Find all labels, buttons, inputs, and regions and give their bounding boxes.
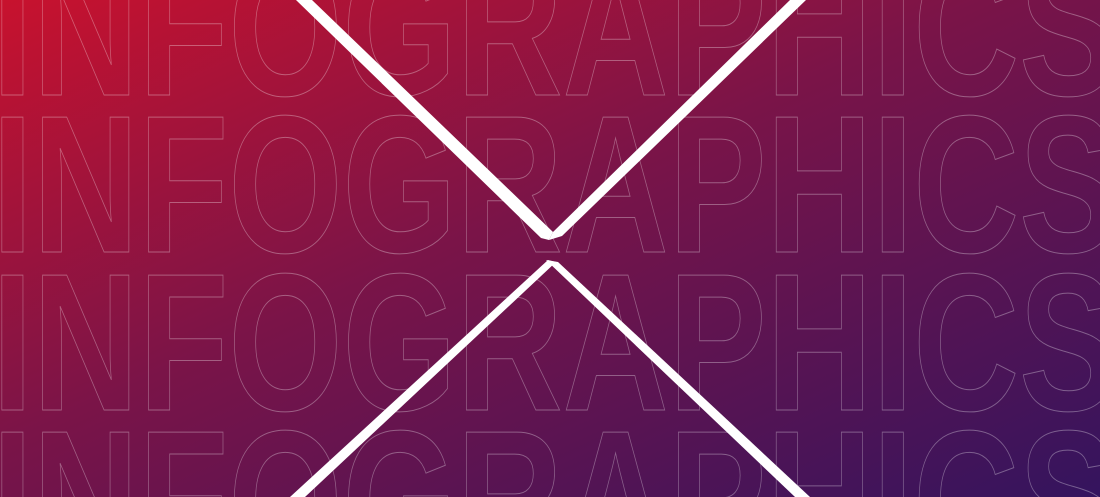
X mark [290,0,810,497]
